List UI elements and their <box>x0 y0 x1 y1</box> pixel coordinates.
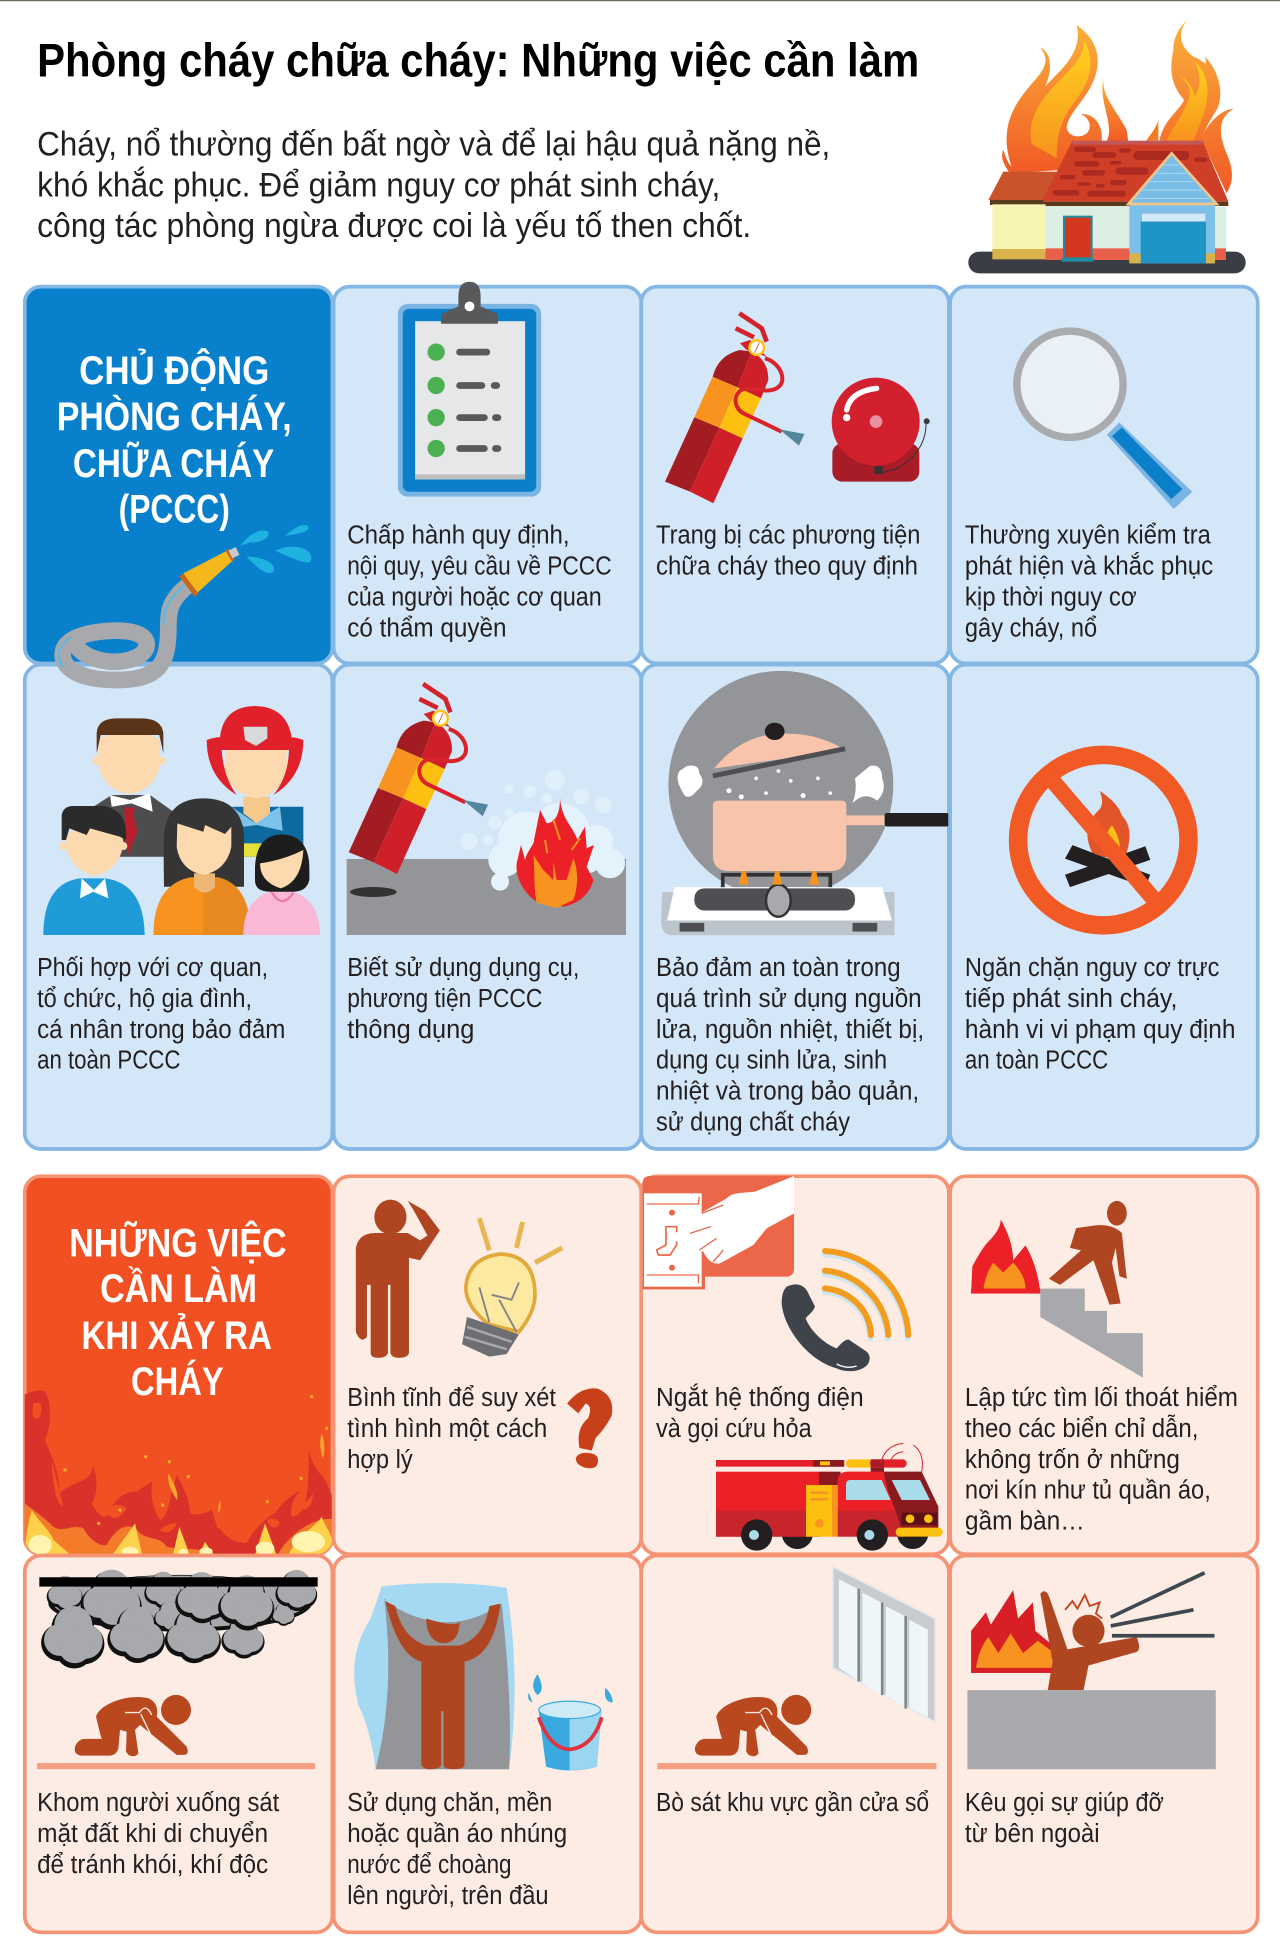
text block: có thẩm quyền <box>347 614 507 642</box>
text block <box>965 1789 1164 1848</box>
text block: của người hoặc cơ quan <box>347 583 602 611</box>
intro text <box>37 126 830 245</box>
text block: nội quy, yêu cầu về PCCC <box>347 553 612 581</box>
text block: tình hình một cách <box>347 1415 547 1443</box>
panel: equipment <box>641 287 949 663</box>
text block: chữa cháy theo quy định <box>656 553 918 581</box>
text block <box>347 1384 557 1474</box>
text block <box>347 522 612 642</box>
icon: pot on stove <box>661 671 949 935</box>
text block: cá nhân trong bảo đảm <box>37 1016 285 1044</box>
panel: heading when fire occurs <box>20 1176 340 1560</box>
text block <box>656 954 924 1136</box>
icon: person under blanket <box>354 1583 515 1769</box>
icon: running person on stairs <box>1040 1201 1143 1378</box>
heading: (PCCC) <box>119 488 230 532</box>
text block: Trang bị các phương tiện <box>656 522 920 550</box>
heading <box>57 348 292 532</box>
text block <box>347 1789 567 1910</box>
text block: gây cháy, nổ <box>965 614 1097 642</box>
text block: Bò sát khu vực gần cửa sổ <box>656 1789 929 1817</box>
heading <box>69 1221 287 1404</box>
text block: nước để choàng <box>347 1851 512 1879</box>
text block: an toàn PCCC <box>965 1047 1108 1075</box>
text block: Biết sử dụng dụng cụ, <box>347 954 579 982</box>
text block: kịp thời nguy cơ <box>965 583 1137 611</box>
text block: và gọi cứu hỏa <box>656 1415 812 1443</box>
text block: gầm bàn… <box>965 1508 1085 1536</box>
text block: an toàn PCCC <box>37 1047 180 1075</box>
panel: safe heat use <box>641 665 949 1149</box>
icon: water hose <box>59 525 311 680</box>
heading: CHÁY <box>131 1360 224 1404</box>
panel: heading prevention <box>25 287 332 680</box>
text block: Khom người xuống sát <box>37 1789 280 1817</box>
text block: tổ chức, hộ gia đình, <box>37 985 252 1013</box>
wall <box>967 1690 1216 1769</box>
text block: hợp lý <box>347 1446 413 1474</box>
text block: lửa, nguồn nhiệt, thiết bị, <box>656 1016 924 1044</box>
icon: light bulb <box>462 1218 562 1357</box>
icon: window <box>833 1567 935 1722</box>
text block: quá trình sử dụng nguồn <box>656 985 922 1013</box>
icon: phone with signal <box>782 1251 908 1371</box>
icon: flames <box>971 1590 1058 1673</box>
text block: để tránh khói, khí độc <box>37 1851 268 1879</box>
heading: CẦN LÀM <box>100 1267 257 1311</box>
icon: clipboard <box>398 282 541 497</box>
heading: NHỮNG VIỆC <box>69 1221 287 1265</box>
flames background <box>20 1390 340 1560</box>
text block: Sử dụng chăn, mền <box>347 1789 552 1817</box>
panel: crouch below smoke <box>25 1555 332 1932</box>
text block <box>37 1789 280 1879</box>
intro text: Cháy, nổ thường đến bất ngờ và để lại hậu quả nặng nề, <box>37 126 830 164</box>
panel: checklist <box>334 282 641 663</box>
icon: alarm bell <box>832 378 930 482</box>
icon: fire extinguisher <box>665 313 804 503</box>
title: Phòng cháy chữa cháy: Những việc cần làm <box>37 35 919 87</box>
text block: mặt đất khi di chuyển <box>37 1820 268 1848</box>
icon: crouching person <box>75 1695 191 1756</box>
text block: Phối hợp với cơ quan, <box>37 954 268 982</box>
text block <box>656 522 920 581</box>
icon: person shouting <box>1040 1591 1139 1690</box>
text block <box>37 954 285 1075</box>
icon: magnifying glass <box>1017 331 1192 509</box>
icon: shout lines <box>1065 1573 1215 1636</box>
text block: Bình tĩnh để suy xét <box>347 1384 557 1412</box>
heading: KHI XẢY RA <box>82 1314 272 1358</box>
icon: crawling person <box>695 1695 811 1756</box>
text block <box>347 954 579 1044</box>
text block: dụng cụ sinh lửa, sinh <box>656 1047 887 1075</box>
text block: hành vi vi phạm quy định <box>965 1016 1236 1044</box>
text block: theo các biển chỉ dẫn, <box>965 1414 1198 1443</box>
panel: using equipment <box>334 665 641 1149</box>
floor line <box>657 1763 937 1769</box>
text block: phát hiện và khắc phục <box>965 552 1213 581</box>
text block <box>965 1384 1238 1536</box>
icon: hand on switch <box>643 1176 794 1289</box>
panel: find exit <box>950 1176 1258 1554</box>
heading: CHỦ ĐỘNG <box>79 348 269 393</box>
icon: group of people <box>43 706 320 935</box>
icon: thinking person <box>356 1200 440 1358</box>
text block: hoặc quần áo nhúng <box>347 1820 567 1848</box>
text block <box>965 954 1236 1075</box>
panel: cut power and call <box>641 1176 949 1554</box>
text block: Kêu gọi sự giúp đỡ <box>965 1789 1164 1817</box>
intro text: công tác phòng ngừa được coi là yếu tố then chốt. <box>37 207 751 245</box>
icon: water bucket <box>528 1674 613 1770</box>
heading: PHÒNG CHÁY, <box>57 395 292 439</box>
panel: inspection <box>950 287 1258 663</box>
icon: table and fire with extinguisher <box>347 684 626 935</box>
text block: Ngăn chặn nguy cơ trực <box>965 954 1219 982</box>
top strip <box>0 0 1280 1</box>
panel: wet blanket <box>334 1555 641 1932</box>
heading: CHỮA CHÁY <box>73 442 274 486</box>
text block: thông dụng <box>347 1016 474 1044</box>
text block: nhiệt và trong bảo quản, <box>656 1078 919 1106</box>
floor line <box>37 1763 315 1769</box>
text block: Lập tức tìm lối thoát hiểm <box>965 1384 1238 1412</box>
icon: question mark <box>567 1388 612 1468</box>
panel: coordination <box>25 665 332 1149</box>
text block <box>965 522 1213 642</box>
text block: Bảo đảm an toàn trong <box>656 954 901 982</box>
text block: nơi kín như tủ quần áo, <box>965 1477 1211 1505</box>
text block: Ngắt hệ thống điện <box>656 1383 864 1412</box>
icon: burning house <box>968 20 1246 273</box>
panel: stay calm <box>334 1176 641 1554</box>
text block: từ bên ngoài <box>965 1820 1100 1848</box>
text block: lên người, trên đầu <box>347 1882 549 1910</box>
text block: Chấp hành quy định, <box>347 522 570 550</box>
icon: fire truck <box>716 1443 943 1551</box>
panel: crawl to window <box>641 1555 949 1932</box>
icon: smoke <box>39 1570 318 1669</box>
intro text: khó khắc phục. Để giảm nguy cơ phát sinh cháy, <box>37 165 720 204</box>
text block: không trốn ở những <box>965 1446 1180 1474</box>
text block: Thường xuyên kiểm tra <box>965 522 1211 550</box>
panel: call for help <box>950 1555 1258 1932</box>
text block: phương tiện PCCC <box>347 985 542 1013</box>
text block <box>656 1383 864 1443</box>
icon: no fire sign <box>1018 755 1189 925</box>
text block: tiếp phát sinh cháy, <box>965 985 1177 1013</box>
panel: prevent ignition <box>950 665 1258 1149</box>
text block: sử dụng chất cháy <box>656 1108 850 1136</box>
icon: flame <box>971 1219 1040 1294</box>
